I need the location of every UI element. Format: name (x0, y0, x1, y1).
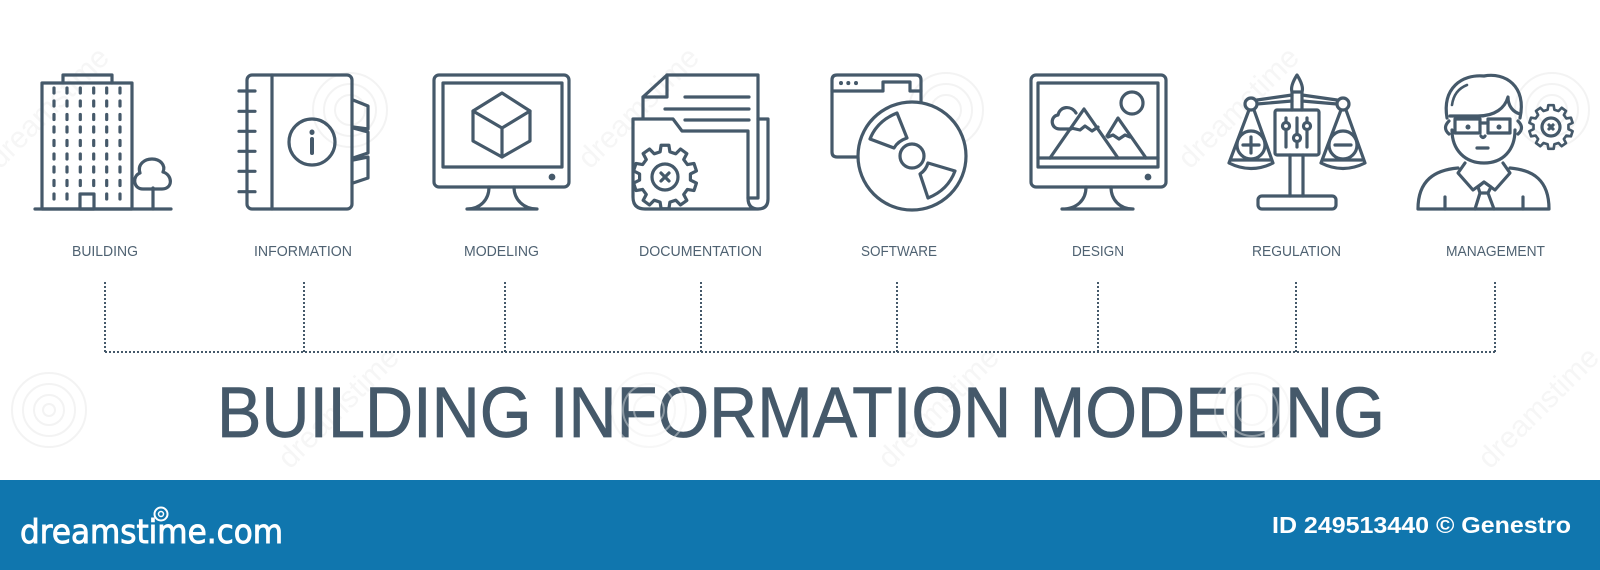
labels: BUILDING (72, 244, 138, 260)
icon: modeling monitor (434, 75, 569, 209)
icon: software disc (832, 75, 966, 210)
icon: information notebook (239, 75, 368, 209)
icon: building (35, 75, 171, 209)
watermark overlay on title (612, 373, 1289, 447)
icon: documentation folder (625, 75, 768, 217)
watermark pattern (0, 41, 1600, 475)
watermark pattern: dreamstime (872, 341, 1006, 475)
icon: regulation scales (1229, 75, 1365, 209)
labels: DOCUMENTATION (639, 244, 762, 260)
title: BUILDING INFORMATION MODELING (217, 374, 1385, 453)
icon: management person (1418, 75, 1578, 209)
watermark pattern: dreamstime (1172, 41, 1306, 175)
footer bar (0, 480, 1600, 570)
labels: SOFTWARE (861, 244, 937, 260)
labels: MANAGEMENT (1446, 244, 1545, 260)
watermark pattern: dreamstime (272, 341, 406, 475)
labels: INFORMATION (254, 244, 352, 260)
footer credit: ID 249513440 © Genestro (1272, 512, 1571, 538)
labels: REGULATION (1252, 244, 1341, 260)
watermark pattern: dreamstime (572, 41, 706, 175)
footer logo: dreamstime.com (20, 512, 283, 551)
labels: MODELING (464, 244, 539, 260)
labels: DESIGN (1072, 244, 1124, 260)
dotted connector (105, 282, 1495, 352)
labels (72, 244, 1545, 260)
icon: design monitor (1031, 75, 1166, 209)
